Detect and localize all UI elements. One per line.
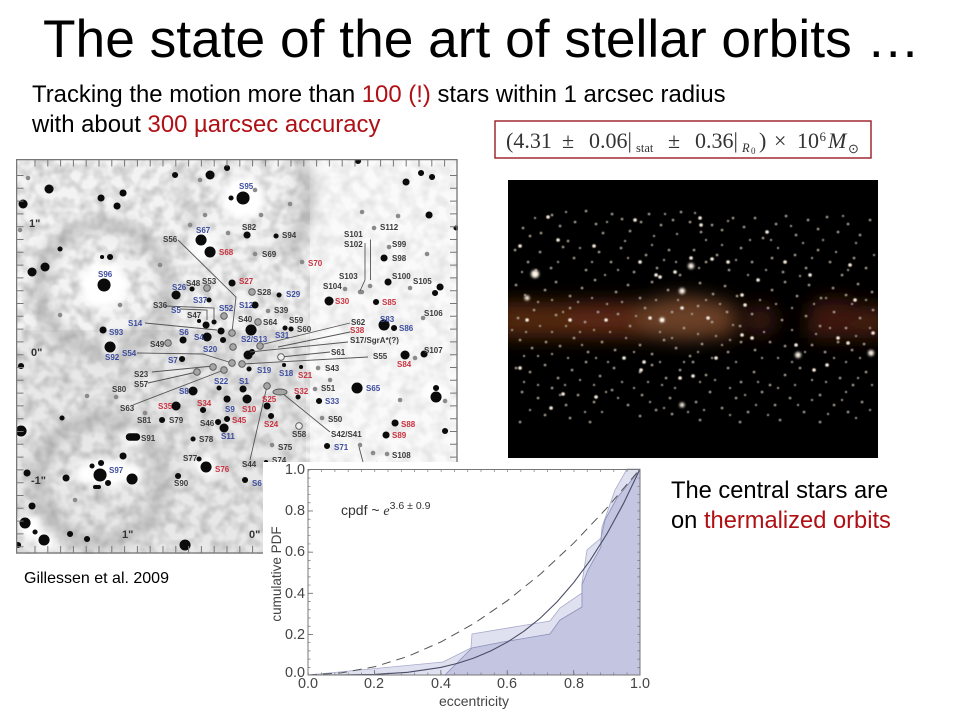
star labels: dark: S101 [344, 230, 363, 239]
star labels: dark: S98 [392, 254, 407, 263]
star labels: dark: S42/S41 [331, 430, 362, 439]
callout: black hole mass formula: 10 [797, 128, 819, 153]
y axis tick labels [285, 462, 305, 681]
nebula band [495, 296, 888, 340]
callout: black hole mass formula: (4.31 [506, 128, 552, 153]
star labels: blue: S31 [275, 331, 290, 340]
black stars [18, 161, 456, 545]
star labels: blue: S93 [109, 328, 124, 337]
star labels: blue: S6 [179, 328, 189, 337]
callout: black hole mass formula: ± [668, 128, 680, 153]
star labels: red [158, 248, 416, 474]
star labels: dark: S80 [112, 385, 127, 394]
star labels: blue: S96 [98, 270, 113, 279]
axis labels: arcseconds: 1" [122, 529, 133, 541]
star labels: dark: S63 [120, 404, 135, 413]
star labels: dark: S112 [380, 223, 399, 232]
axis labels: arcseconds: 0" [31, 347, 42, 359]
star labels: dark: S57 [134, 380, 149, 389]
x axis tick labels: 0.6 [497, 676, 517, 692]
star labels: blue: S37 [193, 296, 208, 305]
stars: medium [520, 217, 873, 408]
star labels: dark: S104 [323, 282, 342, 291]
star labels: dark [112, 223, 443, 488]
callout: black hole mass formula: ± [562, 128, 574, 153]
star labels: blue: S6 [252, 479, 262, 488]
star labels: dark: S23 [134, 370, 149, 379]
text block: tracking statement: Tracking the motion more than 100 (!) stars within 1 arcsec radius [32, 81, 726, 108]
star labels: dark: S103 [339, 272, 358, 281]
text block: tracking statement [32, 81, 726, 138]
axis labels: arcseconds: -1" [31, 475, 46, 487]
dashed reference curve [308, 469, 640, 675]
x axis tick labels: 0.8 [564, 676, 584, 692]
star labels: blue: S4 [194, 333, 204, 342]
star labels: blue: S54 [122, 349, 137, 358]
star labels: blue: S86 [399, 324, 414, 333]
callout: black hole mass formula: stat [636, 141, 654, 155]
text block: tracking statement: with about 300 µarcsec accuracy [32, 110, 380, 138]
star labels: dark: S102 [344, 240, 363, 249]
star labels: dark: S99 [392, 240, 407, 249]
shaded confidence band [308, 469, 640, 675]
star labels: red: S21 [298, 371, 313, 380]
frame and axis ticks [17, 160, 457, 553]
star labels: dark: S77 [183, 454, 198, 463]
star labels: dark: S90 [174, 479, 189, 488]
callout: black hole mass formula: 6 [820, 129, 826, 144]
star labels: dark: S53 [202, 277, 217, 286]
star labels: dark: S55 [373, 352, 388, 361]
star labels: blue: S2/S13 [241, 335, 268, 344]
callout: black hole mass formula: 0.06| [589, 128, 632, 153]
solid fit curve [308, 469, 640, 675]
star labels: dark: S36 [153, 301, 168, 310]
star labels: dark: S39 [274, 306, 289, 315]
stars: bright [527, 266, 871, 405]
star labels: dark: S64 [263, 318, 278, 327]
star labels: dark: S40 [238, 315, 253, 324]
panel: cumulative PDF chart [263, 462, 650, 709]
y axis title: cumulative PDF [269, 526, 284, 622]
star labels: blue: S97 [109, 466, 124, 475]
star labels: dark: S48 [186, 279, 201, 288]
callout: black hole mass formula: × [774, 128, 786, 153]
star labels: dark: S60 [297, 325, 312, 334]
star labels: blue: S65 [366, 384, 381, 393]
panel: star field image [508, 180, 878, 458]
star labels: blue: S33 [325, 397, 340, 406]
star labels: dark: S75 [278, 443, 293, 452]
star labels: dark: S100 [392, 272, 411, 281]
axis labels: arcseconds: 0" [249, 529, 260, 541]
star labels: dark: S49 [150, 340, 165, 349]
star labels: red: S89 [392, 431, 407, 440]
x axis tick labels [298, 676, 650, 692]
x axis title: eccentricity [439, 693, 509, 709]
text block: thermalized orbits [671, 478, 891, 534]
star labels: dark: S58 [292, 430, 307, 439]
x axis tick labels: 0.2 [364, 676, 384, 692]
star labels: blue: S52 [219, 304, 234, 313]
star labels: blue: S19 [257, 366, 272, 375]
x axis tick labels: 0.0 [298, 676, 318, 692]
star labels: dark: S51 [321, 384, 336, 393]
y axis tick labels: 1.0 [285, 462, 305, 478]
y axis tick labels: 0.8 [285, 503, 305, 519]
star labels: blue: S14 [128, 319, 143, 328]
star labels: dark: S61 [331, 348, 346, 357]
star labels: blue: S7 [168, 356, 178, 365]
star labels: dark: S78 [199, 435, 214, 444]
star labels: dark: S62 [351, 318, 366, 327]
y axis tick labels: 0.4 [285, 586, 305, 602]
star labels: red: S32 [294, 387, 309, 396]
star labels: dark: S28 [257, 288, 272, 297]
title: The state of the art of stellar orbits … [43, 10, 920, 69]
star labels: dark: S108 [392, 451, 411, 460]
callout: black hole mass formula: M [827, 128, 848, 153]
formula annotation: 3.6 ± 0.9 [390, 500, 431, 512]
chart frame and ticks [308, 470, 640, 675]
star labels: dark: S59 [289, 316, 304, 325]
text block: thermalized orbits: on thermalized orbits [671, 508, 891, 534]
star labels: red: S84 [397, 360, 412, 369]
shaded lower distribution [445, 470, 640, 675]
callout: black hole mass formula: ⊙ [848, 141, 859, 156]
star labels: red: S24 [264, 420, 279, 429]
star labels: dark: S94 [282, 231, 297, 240]
callout: black hole mass formula: 0.36| [695, 128, 738, 153]
y axis tick labels: 0.2 [285, 627, 305, 643]
star labels: dark: S44 [242, 460, 257, 469]
star labels: blue: S11 [221, 432, 235, 441]
star labels: dark: S56 [163, 235, 178, 244]
panel: stellar map with labelled stars [16, 159, 458, 554]
star labels: blue: S83 [380, 315, 395, 324]
star labels: red: S25 [262, 395, 277, 404]
star labels: dark: S43 [325, 364, 340, 373]
star labels: blue: S1 [239, 377, 249, 386]
star labels: dark: S105 [413, 277, 432, 286]
ringed stars [165, 285, 302, 429]
star labels: dark: S107 [424, 346, 443, 355]
leader lines [133, 240, 382, 466]
axis labels: arcseconds: 1" [29, 218, 40, 230]
star labels: dark: S79 [169, 416, 184, 425]
callout: black hole mass formula: ) [759, 128, 766, 153]
star labels: dark: S17/SgrA*(?) [350, 336, 399, 345]
star labels: dark: S46 [200, 419, 215, 428]
star labels: blue: S22 [214, 377, 229, 386]
star labels: blue: S95 [239, 182, 254, 191]
star labels: dark: S91 [141, 434, 156, 443]
text block: thermalized orbits: The central stars are [671, 478, 888, 504]
star labels: red: S45 [232, 416, 247, 425]
star labels: dark: S47 [187, 311, 202, 320]
y axis tick labels: 0.0 [285, 665, 305, 681]
faint grey stars [20, 178, 445, 500]
callout: black hole mass formula [494, 120, 872, 159]
star labels: blue: S18 [279, 369, 294, 378]
star labels: red: S34 [197, 399, 212, 408]
y axis tick labels: 0.6 [285, 544, 305, 560]
star labels: blue: S67 [196, 226, 211, 235]
star labels: red: S30 [335, 297, 350, 306]
star labels: blue: S9 [225, 405, 235, 414]
text block: citation: Gillessen et al. 2009 [24, 570, 169, 587]
star labels: dark: S69 [262, 250, 277, 259]
star labels: dark: S82 [242, 223, 257, 232]
star labels: red: S88 [401, 420, 416, 429]
star labels: red: S68 [219, 248, 234, 257]
star labels: blue: S26 [172, 283, 187, 292]
stars: faint [512, 211, 874, 422]
star labels: blue: S92 [105, 353, 120, 362]
star labels: dark: S106 [424, 309, 443, 318]
axis labels: arcseconds [29, 218, 260, 541]
star labels: blue: S5 [171, 306, 181, 315]
star labels: red: S85 [382, 298, 397, 307]
formula annotation: cpdf ~ e [341, 502, 390, 519]
star labels: red: S35 [158, 402, 173, 411]
star labels: blue: S71 [334, 443, 349, 452]
x axis tick labels: 0.4 [431, 676, 451, 692]
star labels: red: S76 [215, 465, 230, 474]
star labels: blue [98, 182, 414, 488]
star labels: red: S27 [239, 277, 254, 286]
star labels: red: S38 [350, 326, 365, 335]
star labels: blue: S20 [203, 345, 218, 354]
star labels: red: S70 [308, 259, 323, 268]
star labels: dark: S50 [328, 415, 343, 424]
star labels: blue: S29 [286, 290, 301, 299]
star labels: dark: S74 [272, 456, 287, 465]
star labels: blue: S12 [239, 301, 254, 310]
star labels: blue: S8 [179, 387, 189, 396]
star labels: red: S10 [242, 405, 257, 414]
star labels: dark: S81 [137, 416, 152, 425]
callout: black hole mass formula: 0 [751, 146, 756, 156]
x axis tick labels: 1.0 [630, 676, 650, 692]
callout: black hole mass formula: R [741, 141, 750, 155]
